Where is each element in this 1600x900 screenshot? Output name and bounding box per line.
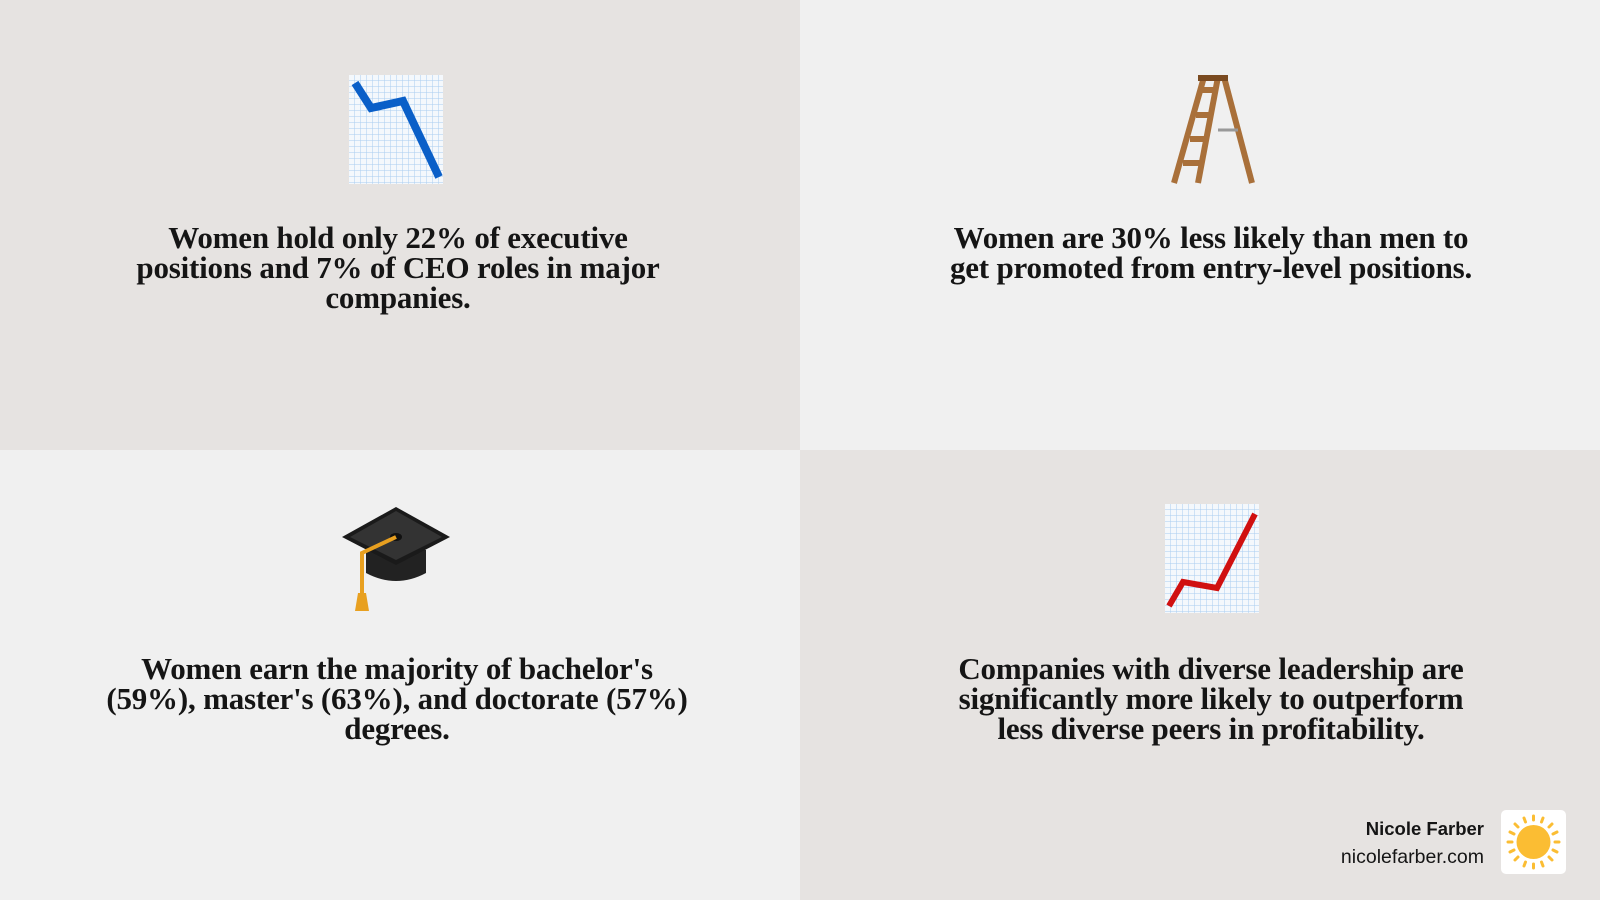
panel: promotion — [800, 0, 1600, 450]
text: executive stat: positions and 7% of CEO roles in major — [136, 250, 660, 285]
text: executive stat: companies. — [325, 280, 471, 315]
text: profitability stat — [958, 651, 1464, 746]
text: degrees stat: degrees. — [344, 711, 450, 746]
text: profitability stat: significantly more likely to outperform — [959, 681, 1463, 716]
panel: diverse leadership — [800, 450, 1600, 900]
icon: rising chart — [1165, 504, 1259, 613]
text: executive stat — [136, 220, 660, 315]
icon: ladder — [1171, 75, 1255, 184]
logo: sun — [1501, 810, 1566, 874]
panel: degrees — [0, 450, 800, 900]
panel: executive positions — [0, 0, 800, 450]
text: promotion stat — [950, 220, 1472, 285]
text: executive stat: Women hold only 22% of executive — [168, 220, 628, 255]
text: degrees stat: Women earn the majority of bachelor's — [141, 651, 653, 686]
icon: graduation cap — [342, 507, 450, 611]
text: profitability stat: Companies with diverse leadership are — [958, 651, 1464, 686]
footer: author: nicolefarber.com — [1341, 846, 1484, 868]
text: degrees stat — [106, 651, 688, 746]
text: degrees stat: (59%), master's (63%), and doctorate (57%) — [106, 681, 688, 716]
footer: author — [1341, 818, 1484, 868]
text: promotion stat: Women are 30% less likely than men to — [954, 220, 1468, 255]
text: promotion stat: get promoted from entry-level positions. — [950, 250, 1472, 285]
text: profitability stat: less diverse peers in profitability. — [997, 711, 1425, 746]
footer: author: Nicole Farber — [1366, 818, 1484, 839]
icon: falling chart — [349, 75, 443, 184]
